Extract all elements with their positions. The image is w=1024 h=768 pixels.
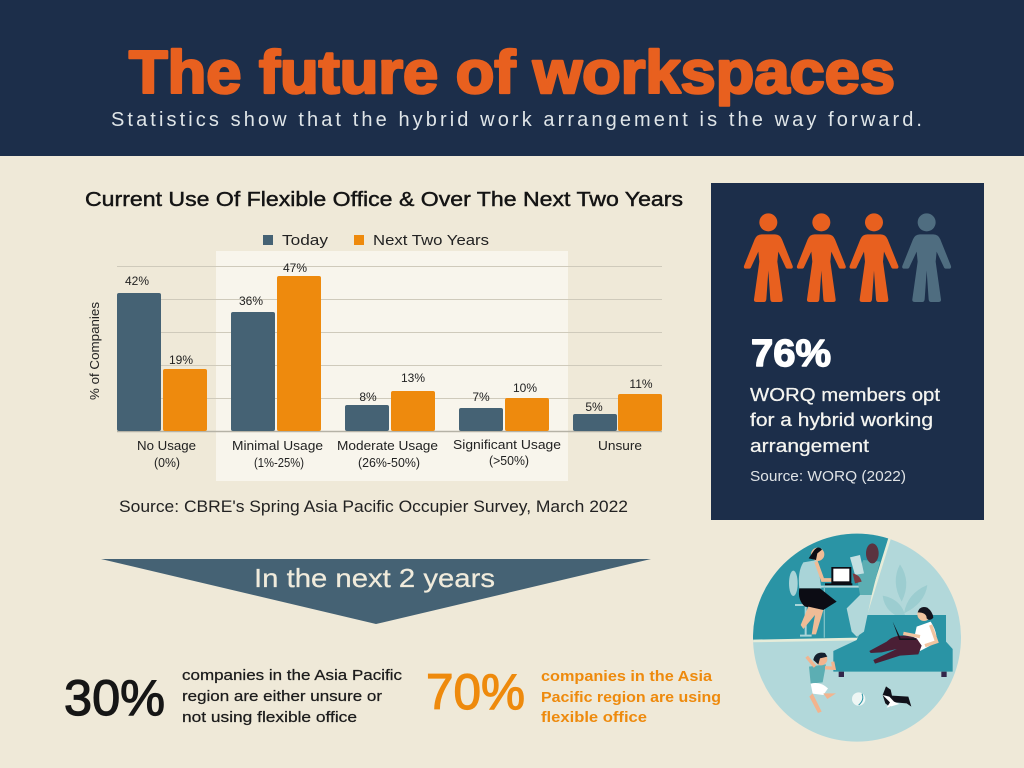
arrow banner: next 2 years: In the next 2 years — [254, 563, 495, 593]
category labels: (>50%) — [489, 454, 529, 468]
30% description: region are either unsure or — [182, 688, 382, 705]
data labels — [125, 261, 653, 414]
bars: today — [117, 293, 617, 431]
70% description: companies in the Asia — [541, 668, 713, 685]
y axis label: % of Companies — [88, 302, 102, 400]
stat description: for a hybrid working — [750, 410, 933, 430]
category labels: (1%-25%) — [254, 456, 304, 470]
title: The future of workspaces — [129, 39, 895, 106]
chart source: Source: CBRE's Spring Asia Pacific Occupier Survey, March 2022 — [119, 498, 628, 516]
category labels: (26%-50%) — [358, 456, 420, 470]
category labels: Unsure — [598, 439, 642, 453]
stat: 70% — [426, 664, 721, 726]
data labels: 10% — [513, 381, 537, 395]
chart legend: Today — [282, 232, 329, 249]
data labels: 8% — [359, 390, 377, 404]
data labels: 11% — [629, 377, 653, 391]
stat description: WORQ members opt — [750, 385, 940, 405]
sofa — [833, 615, 953, 672]
data labels: 5% — [585, 400, 603, 414]
data labels: 47% — [283, 261, 307, 275]
arrow banner: next 2 years — [101, 559, 651, 624]
plant — [883, 564, 927, 615]
woman at desk — [789, 547, 872, 638]
data labels: 13% — [401, 371, 425, 385]
category labels: No Usage — [137, 439, 196, 453]
category labels — [137, 438, 642, 470]
30% description: companies in the Asia Pacific — [182, 667, 403, 684]
data labels: 42% — [125, 274, 149, 288]
chart title: Current Use Of Flexible Office & Over The Next Two Years — [85, 188, 683, 211]
ball — [852, 692, 865, 706]
70% description — [541, 668, 721, 726]
category labels: Minimal Usage — [232, 439, 323, 453]
stat description — [750, 385, 940, 456]
child — [807, 653, 836, 713]
stat value: 76% — [751, 333, 831, 375]
70% description: Pacific region are using — [541, 689, 721, 706]
colleague — [847, 543, 880, 637]
category labels: Moderate Usage — [337, 439, 438, 453]
panel: hybrid stat — [711, 183, 984, 520]
data labels: 36% — [239, 294, 263, 308]
stat source: Source: WORQ (2022) — [750, 469, 906, 485]
illustration: hybrid work scene — [750, 532, 961, 742]
header banner — [0, 0, 1024, 156]
subtitle: Statistics show that the hybrid work arrangement is the way forward. — [111, 109, 922, 131]
30% description: not using flexible office — [182, 709, 357, 726]
chart legend — [263, 232, 489, 249]
woman on sofa — [869, 607, 937, 664]
stat: 30% — [64, 667, 403, 726]
bars: next two years — [163, 276, 662, 431]
bar chart — [88, 251, 662, 481]
category labels: Significant Usage — [453, 438, 561, 452]
chart legend: Next Two Years — [373, 232, 489, 249]
30% description — [182, 667, 403, 726]
category labels: (0%) — [154, 456, 180, 470]
data labels: 19% — [169, 353, 193, 367]
stat description: arrangement — [750, 436, 869, 456]
70% description: flexible office — [541, 709, 647, 726]
icon: four people — [744, 213, 951, 302]
stat: 70%: 70% — [426, 664, 525, 720]
stat: 30%: 30% — [64, 670, 165, 726]
data labels: 7% — [472, 390, 490, 404]
dog — [883, 686, 911, 708]
